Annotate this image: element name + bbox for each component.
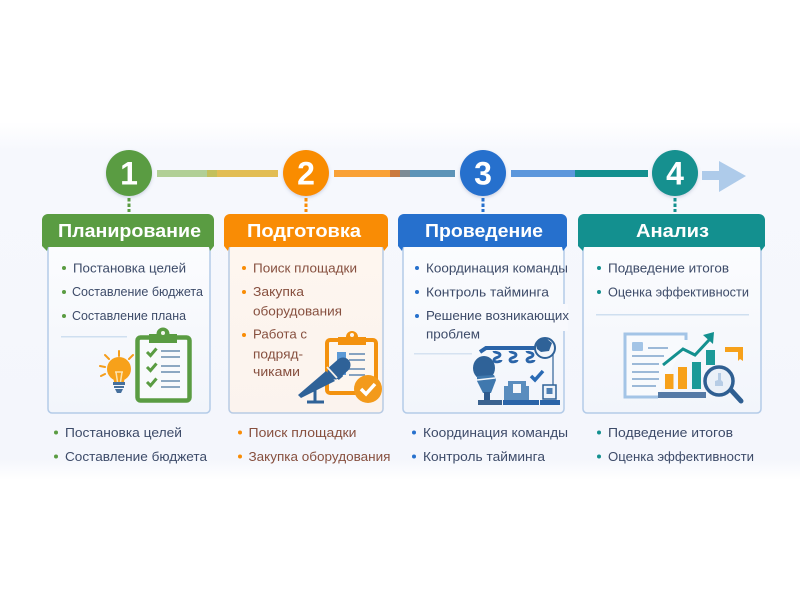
step 4 number badge — [652, 150, 698, 196]
icon: checklist clipboard — [138, 328, 190, 400]
bottom list 3: Контроль тайминга — [423, 449, 546, 464]
heading ribbon 1 — [42, 214, 214, 251]
bullet list 1: Составление бюджета — [72, 284, 204, 299]
bottom list 1: Составление бюджета — [65, 449, 208, 464]
heading ribbon 2 — [224, 214, 388, 251]
arrow: timeline end — [702, 161, 746, 192]
panel: Планирование — [42, 214, 214, 413]
heading ribbon 4 — [578, 214, 765, 251]
dotted connector: step 1 — [128, 198, 130, 212]
bullet list 2: подряд- — [253, 346, 303, 362]
icon: clipboard with microphone — [298, 331, 382, 403]
icon: stage with microphone — [473, 338, 560, 405]
bullet list 1: Составление плана — [72, 308, 187, 323]
bullet list 4: Оценка эффективности — [608, 284, 749, 300]
bullet list 3: проблем — [426, 326, 480, 342]
step 3 number badge — [460, 150, 506, 196]
bottom list 1 — [54, 425, 208, 464]
heading ribbon 2: Подготовка — [247, 221, 362, 241]
bullet list 2: Работа с — [253, 326, 308, 342]
bullet list 2: оборудования — [253, 304, 342, 318]
bullet list 3: Контроль тайминга — [426, 284, 550, 300]
panel body 3 — [403, 245, 564, 413]
panel body 2 — [229, 245, 383, 413]
bottom list 2 — [238, 425, 390, 464]
icon: light bulb — [100, 351, 133, 393]
bullet list 4 — [597, 260, 749, 300]
step 2 number badge — [283, 150, 329, 196]
bullet list 2: чиками — [253, 364, 300, 379]
step 1 number badge — [106, 150, 152, 196]
step 1 number badge: 1 — [120, 156, 138, 192]
bullet list 2: Поиск площадки — [253, 260, 357, 276]
bottom list 3 — [412, 425, 568, 464]
bottom list 4: Подведение итогов — [608, 425, 733, 440]
step 2 number badge: 2 — [297, 156, 315, 192]
heading ribbon 4: Анализ — [636, 221, 709, 241]
bottom list 1: Постановка целей — [65, 425, 182, 440]
bottom list 4 — [597, 425, 754, 464]
bottom list 2: Закупка оборудования — [248, 449, 390, 464]
panel: Проведение — [398, 214, 570, 413]
icon: report with chart and magnifier — [625, 332, 743, 401]
bullet list 3: Координация команды — [426, 260, 568, 276]
heading ribbon 1: Планирование — [58, 221, 201, 241]
background band — [0, 122, 800, 480]
panel: Анализ — [578, 214, 765, 413]
bullet list 3: Решение возникающих — [426, 308, 570, 323]
bullet list 2: Закупка — [253, 284, 305, 299]
heading ribbon 3: Проведение — [425, 221, 543, 241]
bullet list 1 — [62, 260, 204, 323]
bullet list 1: Постановка целей — [73, 260, 186, 276]
bullet list 4: Подведение итогов — [608, 260, 729, 276]
bullet list 3 — [415, 260, 570, 342]
bullet list 2 — [242, 260, 357, 379]
heading ribbon 3 — [398, 214, 567, 251]
dotted connector: step 3 — [482, 198, 484, 212]
panel body 1 — [48, 245, 210, 413]
panel body 4 — [583, 245, 761, 413]
panel: Подготовка — [224, 214, 388, 413]
bottom list 4: Оценка эффективности — [608, 449, 754, 464]
dotted connector: step 2 — [304, 198, 308, 212]
step 3 number badge: 3 — [474, 156, 492, 192]
timeline connector lines — [157, 170, 648, 177]
dotted connector: step 4 — [674, 198, 676, 212]
bottom list 2: Поиск площадки — [248, 425, 356, 440]
step 4 number badge: 4 — [666, 156, 684, 192]
bottom list 3: Координация команды — [423, 425, 568, 440]
